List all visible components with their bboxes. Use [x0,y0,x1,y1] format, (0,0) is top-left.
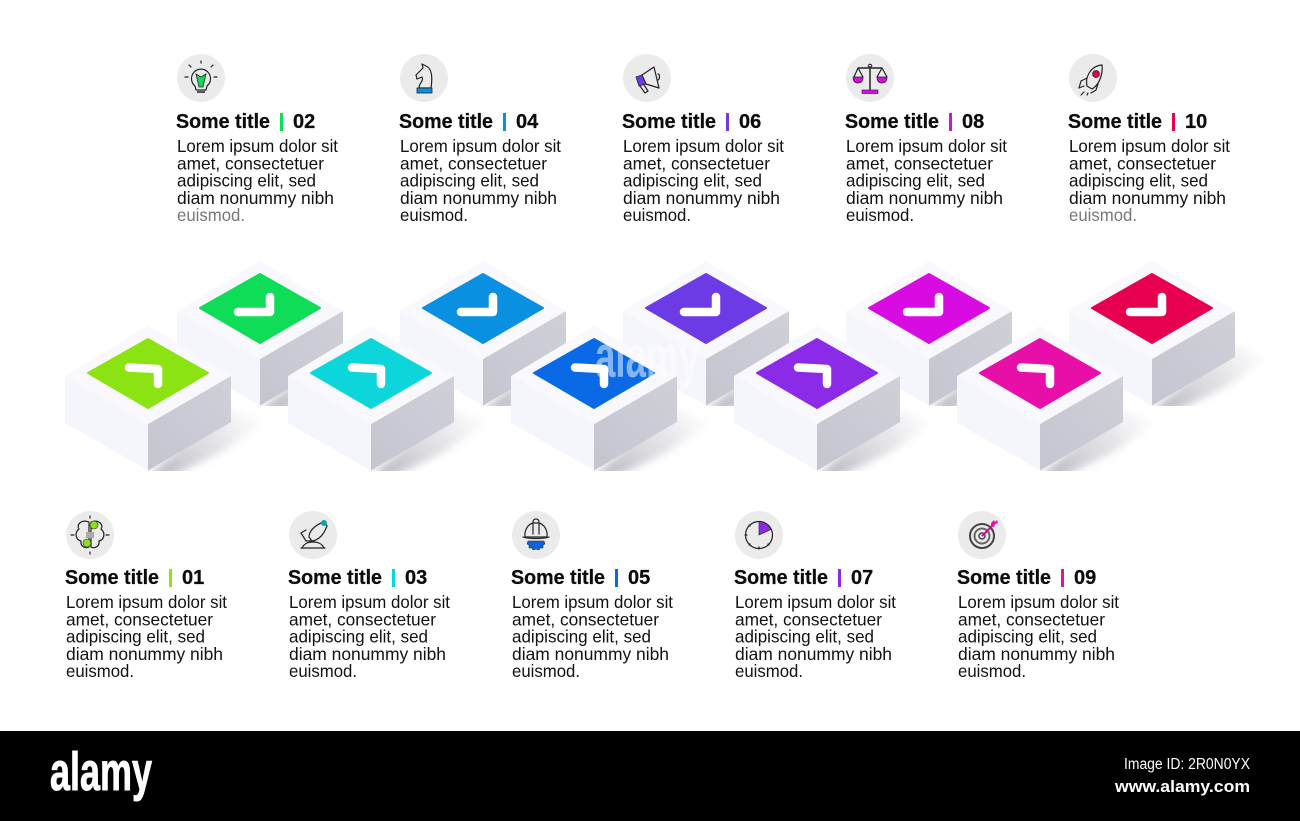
heading 01: Some title [65,567,159,589]
panel: step 05 text [511,511,673,681]
body text 03: amet, consectetuer [289,610,436,630]
heading 05: Some title [511,567,605,589]
body text 01: adipiscing elit, sed [66,626,205,646]
block 03 [288,338,470,471]
heading 01: 01 [182,567,204,589]
icon: brain [66,511,114,559]
body text 06 [623,136,784,225]
body text 02: amet, consectetuer [177,154,324,174]
panel: step 03 text [288,511,450,681]
body text 09: amet, consectetuer [958,610,1105,630]
body text 10: diam nonummy nibh [1069,188,1226,208]
heading 10 [1068,111,1207,133]
body text 06: amet, consectetuer [623,154,770,174]
icon: target and arrow [958,511,1006,559]
heading 09 [957,567,1096,589]
body text 04: euismod. [400,205,468,225]
heading 02: Some title [176,111,270,133]
heading 09: 09 [1074,567,1096,589]
body text 09: adipiscing elit, sed [958,626,1097,646]
icon: scales [846,54,894,102]
body text 05: euismod. [512,661,580,681]
heading 05 [511,567,650,589]
body text 10 [1069,136,1230,225]
body text 01: amet, consectetuer [66,610,213,630]
icon: microscope [289,511,337,559]
body text 10: adipiscing elit, sed [1069,170,1208,190]
heading 08: 08 [962,111,984,133]
heading 08: Some title [845,111,939,133]
body text 07: Lorem ipsum dolor sit [735,592,896,612]
body text 07: diam nonummy nibh [735,644,892,664]
body text 04: adipiscing elit, sed [400,170,539,190]
panel: step 07 text [734,511,896,681]
icon: chess knight [400,54,448,102]
body text 03: diam nonummy nibh [289,644,446,664]
block 07 [734,338,916,471]
body text 02 [177,136,338,225]
block 04 [400,273,566,406]
heading 07: 07 [851,567,873,589]
icon: megaphone [623,54,671,102]
panel: step 08 text [845,54,1007,225]
body text 04: Lorem ipsum dolor sit [400,136,561,156]
body text 08: euismod. [846,205,914,225]
panel: step 04 text [399,54,561,225]
body text 08: diam nonummy nibh [846,188,1003,208]
body text 03: adipiscing elit, sed [289,626,428,646]
block 02 [177,273,343,406]
heading 01 [65,567,204,589]
icon: helmet and gear [512,511,560,559]
body text 08 [846,136,1007,225]
body text 06: Lorem ipsum dolor sit [623,136,784,156]
footer bar [0,731,1300,821]
body text 06: euismod. [623,205,691,225]
heading 07 [734,567,873,589]
body text 04: diam nonummy nibh [400,188,557,208]
block 06 [623,273,789,406]
heading 04: 04 [516,111,539,133]
body text 02: adipiscing elit, sed [177,170,316,190]
heading 04: Some title [399,111,493,133]
panel: step 06 text [622,54,784,225]
body text 01: diam nonummy nibh [66,644,223,664]
panel: step 02 text [176,54,338,225]
body text 02: Lorem ipsum dolor sit [177,136,338,156]
body text 05 [512,592,673,681]
body text 05: amet, consectetuer [512,610,659,630]
body text 06: adipiscing elit, sed [623,170,762,190]
body text 01: euismod. [66,661,134,681]
body text 10: amet, consectetuer [1069,154,1216,174]
icon: light bulb [177,54,225,102]
heading 06: Some title [622,111,716,133]
heading 07: Some title [734,567,828,589]
body text 09: Lorem ipsum dolor sit [958,592,1119,612]
block 09 [957,338,1140,471]
body text 10: Lorem ipsum dolor sit [1069,136,1230,156]
footer logo: alamy [50,742,152,802]
heading 03: Some title [288,567,382,589]
body text 09: euismod. [958,661,1026,681]
website: www.alamy.com [1114,778,1250,796]
body text 05: adipiscing elit, sed [512,626,651,646]
block 08 [846,273,1012,406]
block 10 [1069,273,1252,406]
heading 06 [622,111,761,133]
body text 01: Lorem ipsum dolor sit [66,592,227,612]
block 01 [65,338,248,471]
watermark: alamy [595,323,699,390]
body text 10: euismod. [1069,205,1137,225]
body text 05: diam nonummy nibh [512,644,669,664]
body text 09 [958,592,1119,681]
body text 03 [289,592,450,681]
body text 04: amet, consectetuer [400,154,547,174]
block 05 [511,338,694,471]
heading 10: 10 [1185,111,1207,133]
heading 03 [288,567,427,589]
body text 04 [400,136,561,225]
heading 10: Some title [1068,111,1162,133]
body text 05: Lorem ipsum dolor sit [512,592,673,612]
heading 04 [399,111,539,133]
heading 08 [845,111,984,133]
body text 07: euismod. [735,661,803,681]
panel: step 09 text [957,511,1119,681]
body text 02: diam nonummy nibh [177,188,334,208]
heading 05: 05 [628,567,650,589]
body text 08: Lorem ipsum dolor sit [846,136,1007,156]
body text 06: diam nonummy nibh [623,188,780,208]
panel: step 01 text [65,511,227,681]
body text 01 [66,592,227,681]
body text 08: amet, consectetuer [846,154,993,174]
heading 03: 03 [405,567,427,589]
heading 06: 06 [739,111,761,133]
heading 09: Some title [957,567,1051,589]
icon: pie timer [735,511,783,559]
body text 03: euismod. [289,661,357,681]
body text 07 [735,592,896,681]
panel: step 10 text [1068,54,1230,225]
heading 02: 02 [293,111,315,133]
body text 02: euismod. [177,205,245,225]
heading 02 [176,111,315,133]
body text 07: amet, consectetuer [735,610,882,630]
body text 09: diam nonummy nibh [958,644,1115,664]
icon: rocket [1069,54,1117,102]
image id: Image ID: 2R0N0YX [1124,756,1251,773]
body text 07: adipiscing elit, sed [735,626,874,646]
body text 03: Lorem ipsum dolor sit [289,592,450,612]
body text 08: adipiscing elit, sed [846,170,985,190]
